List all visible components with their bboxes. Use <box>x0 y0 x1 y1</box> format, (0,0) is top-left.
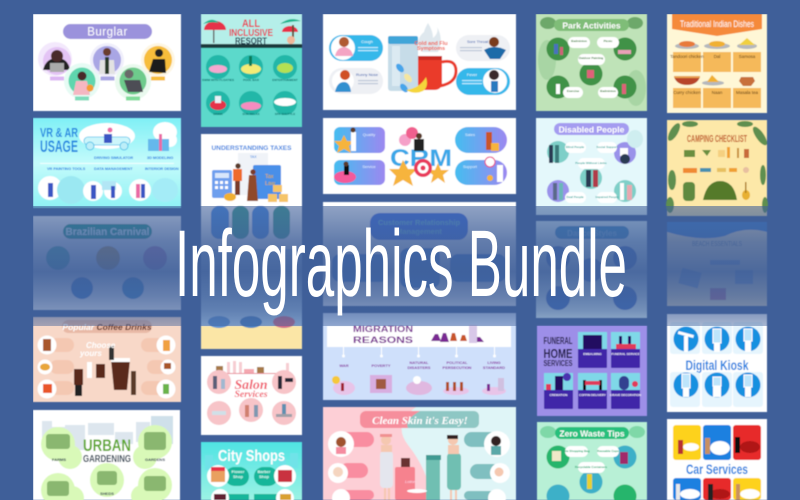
illustration: steam <box>418 23 441 52</box>
symptom: sore throat <box>456 35 510 61</box>
tile labels <box>550 352 641 397</box>
heading: UNDERSTANDING TAXES: UNDERSTANDING TAXES <box>212 145 292 152</box>
tip labels <box>565 446 619 473</box>
reason labels: STANDARD <box>483 365 505 370</box>
connector dots <box>342 347 496 358</box>
heading: CAMPING CHECKLIST: CAMPING CHECKLIST <box>687 134 747 145</box>
illustration: car simulator <box>79 123 135 150</box>
dish cards bottom <box>673 88 761 108</box>
panel: Disabled People: Blind People <box>566 145 584 149</box>
heading: Clean Skin it's Easy! <box>360 411 479 428</box>
service tiles <box>544 332 640 409</box>
labels: SHEDS <box>100 491 114 496</box>
tax option cards <box>211 206 290 239</box>
panel: Migration Reasons <box>323 313 516 400</box>
figure: hooded burglar <box>115 64 151 100</box>
panel: CRM <box>323 118 516 194</box>
tax form: TAX <box>250 155 257 159</box>
dishes top <box>675 38 757 49</box>
heading: City Shops: City Shops <box>218 448 285 465</box>
bottom kiosks <box>670 372 763 407</box>
heading: VR & AR USAGE <box>40 125 78 156</box>
panel: All Inclusive Resort <box>201 14 302 127</box>
labels: FARMS <box>52 457 66 462</box>
reason labels: WAR <box>339 363 349 368</box>
heading: VR & AR USAGE: VR & AR <box>40 125 78 140</box>
tent <box>703 181 737 200</box>
bottom service tiles <box>673 478 761 500</box>
panel: Disabled People: Social Support <box>596 145 618 149</box>
panel: Park Activities: Exercise <box>567 89 579 93</box>
skyline <box>205 453 298 470</box>
tile labels: COFFIN DELIVERY <box>579 393 606 397</box>
activity labels: SUN RELAX <box>242 112 260 116</box>
heading: Park Activities: Park Activities <box>562 20 621 30</box>
figure: thief <box>141 43 175 77</box>
tile labels: CREMATION <box>550 393 567 397</box>
symptom: fever: Fever <box>467 72 478 77</box>
heading: Popular Coffee Drinks: Popular Coffee Drinks <box>62 322 152 332</box>
labels <box>47 156 179 171</box>
heading: Zero Waste Tips: Zero Waste Tips <box>559 428 625 438</box>
shelf <box>216 361 289 374</box>
panel: Digital Kiosk <box>667 314 767 412</box>
gear row 2 <box>683 167 749 173</box>
running figures <box>431 325 484 343</box>
card: quality <box>334 127 385 153</box>
reason labels <box>339 360 505 370</box>
heading: ALL INCLUSIVE RESORT: RESORT <box>235 36 267 47</box>
illustration: coffee cup with baristas: yours <box>79 349 102 358</box>
left tips <box>328 431 374 500</box>
service circles <box>207 370 296 425</box>
leaf decor <box>540 426 645 438</box>
beach figures <box>208 316 295 328</box>
reason labels: POVERTY <box>371 363 391 368</box>
heading: Management <box>396 227 442 236</box>
park figures <box>554 44 631 94</box>
symptom: fever <box>456 68 510 95</box>
woman in towel left <box>380 434 393 500</box>
heading: ALL INCLUSIVE RESORT: INCLUSIVE <box>229 28 273 39</box>
panel: Park Activities: Badminton <box>571 39 587 43</box>
shop labels: Shop <box>259 474 270 479</box>
reason labels: LIVING <box>487 360 501 365</box>
panel: Traditional Indian Dishes: Samosa <box>739 54 756 59</box>
shop pills <box>225 467 278 500</box>
panel: Beach activities <box>201 249 302 349</box>
heading: Brazilian Carnival <box>63 224 152 239</box>
panel: Traditional Indian Dishes: Tandoori chicken <box>670 54 704 59</box>
activity labels <box>563 37 619 98</box>
activity labels: SWIM WITH FLOATIES <box>202 78 234 82</box>
panel: Traditional Indian Dishes: Masala tea <box>736 90 759 95</box>
panel: Disabled People: Deaf People <box>566 195 584 199</box>
palms and umbrellas <box>203 19 301 44</box>
drink icons right <box>141 336 176 398</box>
figure: woman <box>64 63 100 99</box>
illustration: coffee cup with baristas <box>74 341 136 396</box>
heading: ALL INCLUSIVE RESORT <box>229 18 273 47</box>
cards <box>332 248 506 288</box>
drink icons left <box>38 336 74 398</box>
heading: Cold and Flu Symptoms <box>414 41 448 52</box>
woman in towel right <box>447 435 461 500</box>
heading: FUNERAL HOME SERVICES: SERVICES <box>544 358 573 368</box>
activity labels <box>202 78 298 116</box>
panel: Zero Waste Tips <box>537 422 647 500</box>
heading: FUNERAL HOME SERVICES: HOME <box>544 346 573 361</box>
panel: Customer Relationship Management <box>323 202 516 306</box>
calculator <box>212 170 232 198</box>
panel: Funeral Home Services <box>537 326 647 416</box>
panel: Salon Services <box>201 356 302 435</box>
panel: Park Activities: Picnic <box>604 39 613 43</box>
top kiosks <box>670 322 763 354</box>
tile labels: GRAVE DECORATION <box>610 393 641 397</box>
guitar <box>742 182 750 200</box>
tile labels: FUNERAL SERVICE <box>611 352 640 356</box>
heading: Digital Kiosk: Digital Kiosk <box>686 357 749 373</box>
card: service <box>334 160 385 185</box>
heading: Clean Skin it's Easy!: Clean Skin it's Easy! <box>372 415 468 427</box>
activity circles <box>546 38 636 98</box>
backpack <box>683 182 695 201</box>
law book <box>253 165 281 199</box>
panel: Zero Waste Tips: Reusable Cups <box>597 449 619 453</box>
labels <box>565 142 617 203</box>
figures <box>549 145 632 200</box>
panel: Urban Gardening <box>33 410 180 500</box>
labels: INTERIOR DESIGN <box>145 167 179 171</box>
heading: Cold and Flu Symptoms: Symptoms <box>417 46 445 52</box>
card: service: Service <box>362 164 376 169</box>
circles <box>546 246 637 310</box>
panel: Car Services <box>667 419 767 500</box>
leaf decor <box>538 17 646 106</box>
symptom: sore throat: Sore Throat <box>467 39 489 44</box>
heading: Traditional Indian Dishes: Traditional Indian Dishes <box>680 19 754 29</box>
symptom: cough: Cough <box>361 39 373 44</box>
card: sales <box>455 127 507 153</box>
heading: MIGRATION REASONS <box>353 324 413 346</box>
heading: FUNERAL HOME SERVICES: FUNERAL <box>544 336 572 347</box>
panel: Beach Essentials <box>667 222 767 306</box>
panel: Traditional Indian Dishes: Naan <box>712 90 723 95</box>
illustration: coffee cup with baristas: Choose <box>86 341 116 350</box>
heading: URBAN GARDENING: URBAN <box>83 436 131 455</box>
gear row 1 <box>684 147 749 158</box>
illustration: 3D modeling <box>148 122 177 151</box>
small labels <box>50 76 165 100</box>
figure: man <box>90 43 124 77</box>
blob <box>627 130 643 148</box>
salon figures <box>212 376 293 417</box>
heading: URBAN GARDENING <box>83 436 131 465</box>
panel: Burglar <box>33 14 181 111</box>
panel: Cold and Flu Symptoms <box>323 14 516 110</box>
circles <box>547 141 636 202</box>
reason labels: PERSECUTION <box>443 365 472 370</box>
panel: Disabled People: Impaired People <box>595 195 619 199</box>
panel: Traditional Indian Dishes: Curry chicken <box>673 90 701 95</box>
symptom: runny nose <box>329 68 383 94</box>
panel: VR & AR Usage <box>33 118 181 208</box>
essentials items <box>678 260 753 300</box>
panel: Popular Coffee Drinks <box>33 317 181 402</box>
shop labels: Flower <box>232 469 245 474</box>
panel: City Shops <box>201 442 302 500</box>
tile labels: EMBALMING <box>583 352 602 356</box>
heading: Disabled People: Disabled People <box>559 124 625 134</box>
coins and boxes <box>224 185 288 202</box>
illustration: CRM letters: CRM <box>390 145 452 172</box>
panel: Zero Waste Tips: Tote Shopping Bag <box>562 449 590 453</box>
labels: GARDENS <box>145 457 165 462</box>
leaves <box>666 121 770 213</box>
card: support <box>455 157 507 185</box>
card: sales: Sales <box>465 132 475 137</box>
illustration: red mug with lemon <box>406 56 456 93</box>
dish cards top <box>673 52 761 72</box>
card: quality: Quality <box>363 132 375 137</box>
heading: MIGRATION REASONS: MIGRATION <box>353 324 413 335</box>
translucent title band <box>0 206 800 326</box>
banner <box>672 14 762 36</box>
garden scenes <box>46 432 166 496</box>
reason labels: POLITICAL <box>446 360 468 365</box>
heading: MIGRATION REASONS: REASONS <box>353 335 413 346</box>
green circles <box>41 425 172 500</box>
heading: Brazilian Carnival: Brazilian Carnival <box>66 227 150 238</box>
heading: ALL INCLUSIVE RESORT: ALL <box>242 18 260 30</box>
shop labels: Shop <box>233 474 244 479</box>
right tips <box>464 431 510 500</box>
dishes bottom <box>674 75 755 86</box>
carnival figures <box>46 246 167 299</box>
panel: Park Activities: Badminton <box>600 89 616 93</box>
panel: Zero Waste Tips: Recyclable Containers <box>575 465 607 469</box>
city skyline <box>42 416 173 452</box>
heading: Salon Services: Services <box>234 389 268 399</box>
law book: Tax <box>265 174 274 180</box>
labels: DRIVING SIMULATOR <box>94 156 133 160</box>
panel: Clean Skin <box>323 407 516 500</box>
panel: Understanding Taxes <box>201 134 302 249</box>
heading: FUNERAL HOME SERVICES <box>544 336 573 368</box>
panel: Disabled People <box>536 118 647 215</box>
heading: Dance Styles: Dance Styles <box>567 229 617 238</box>
panel: Camping Checklist <box>666 120 770 216</box>
floaties <box>209 56 296 110</box>
law book: Law <box>265 181 275 187</box>
heading: Burglar <box>63 24 152 39</box>
heading: Salon Services: Salon <box>234 378 268 393</box>
symptom: cough <box>329 35 383 61</box>
labels: VR PAINTING TOOLS <box>47 167 86 171</box>
reason labels: NATURAL <box>409 360 429 365</box>
heading: Car Services: Car Services <box>686 462 748 477</box>
panel: Park Activities <box>536 14 647 111</box>
shop icons <box>207 465 296 500</box>
panel: Disabled People: People Without Limbs <box>575 161 607 165</box>
heading: Customer Relationship <box>378 218 460 227</box>
activity labels: SPA SHUTTLE <box>275 112 295 116</box>
figure: hacker <box>38 42 72 76</box>
activity labels: DRINK <box>213 112 224 116</box>
lotion bottles: Lotion <box>405 479 417 484</box>
heading: Beach Essentials: BEACH ESSENTIALS <box>692 241 742 248</box>
people <box>233 163 258 201</box>
shop labels <box>232 469 271 479</box>
labels <box>52 457 165 496</box>
top service tiles <box>673 425 761 460</box>
illustration: medicine jar <box>388 36 418 94</box>
illustration: CRM letters <box>389 127 452 186</box>
labels: 3D MODELING <box>147 156 173 160</box>
activity labels: ENTERTAINMENT <box>272 78 298 82</box>
panel: Brazilian Carnival <box>33 216 181 310</box>
labels: DATA MANAGEMENT <box>94 167 133 171</box>
heading: Cold and Flu Symptoms: Cold and Flu <box>414 41 448 47</box>
panel: Traditional Indian Dishes: Dal <box>714 54 720 59</box>
card: support: Support <box>463 164 478 169</box>
illustrations: people using VR <box>38 176 178 204</box>
symptom: runny nose: Runny Nose <box>356 72 379 77</box>
activity circles <box>206 55 297 115</box>
heading <box>370 213 468 240</box>
reason labels: DISASTERS <box>408 365 431 370</box>
heading: VR & AR USAGE: USAGE <box>40 137 78 156</box>
tip circles <box>546 446 636 500</box>
reason illustrations <box>332 375 506 395</box>
panel: Park Activities: Outdoor Painting <box>579 56 603 60</box>
shop labels: Barber <box>258 469 271 474</box>
activity labels: POOL BAR <box>243 78 260 82</box>
heading: Burglar: Burglar <box>87 26 128 38</box>
panel: Traditional Indian Dishes <box>667 14 767 113</box>
heading: URBAN GARDENING: GARDENING <box>83 454 131 465</box>
lotion bottles <box>395 455 441 500</box>
panel: Dance Styles <box>536 221 647 318</box>
